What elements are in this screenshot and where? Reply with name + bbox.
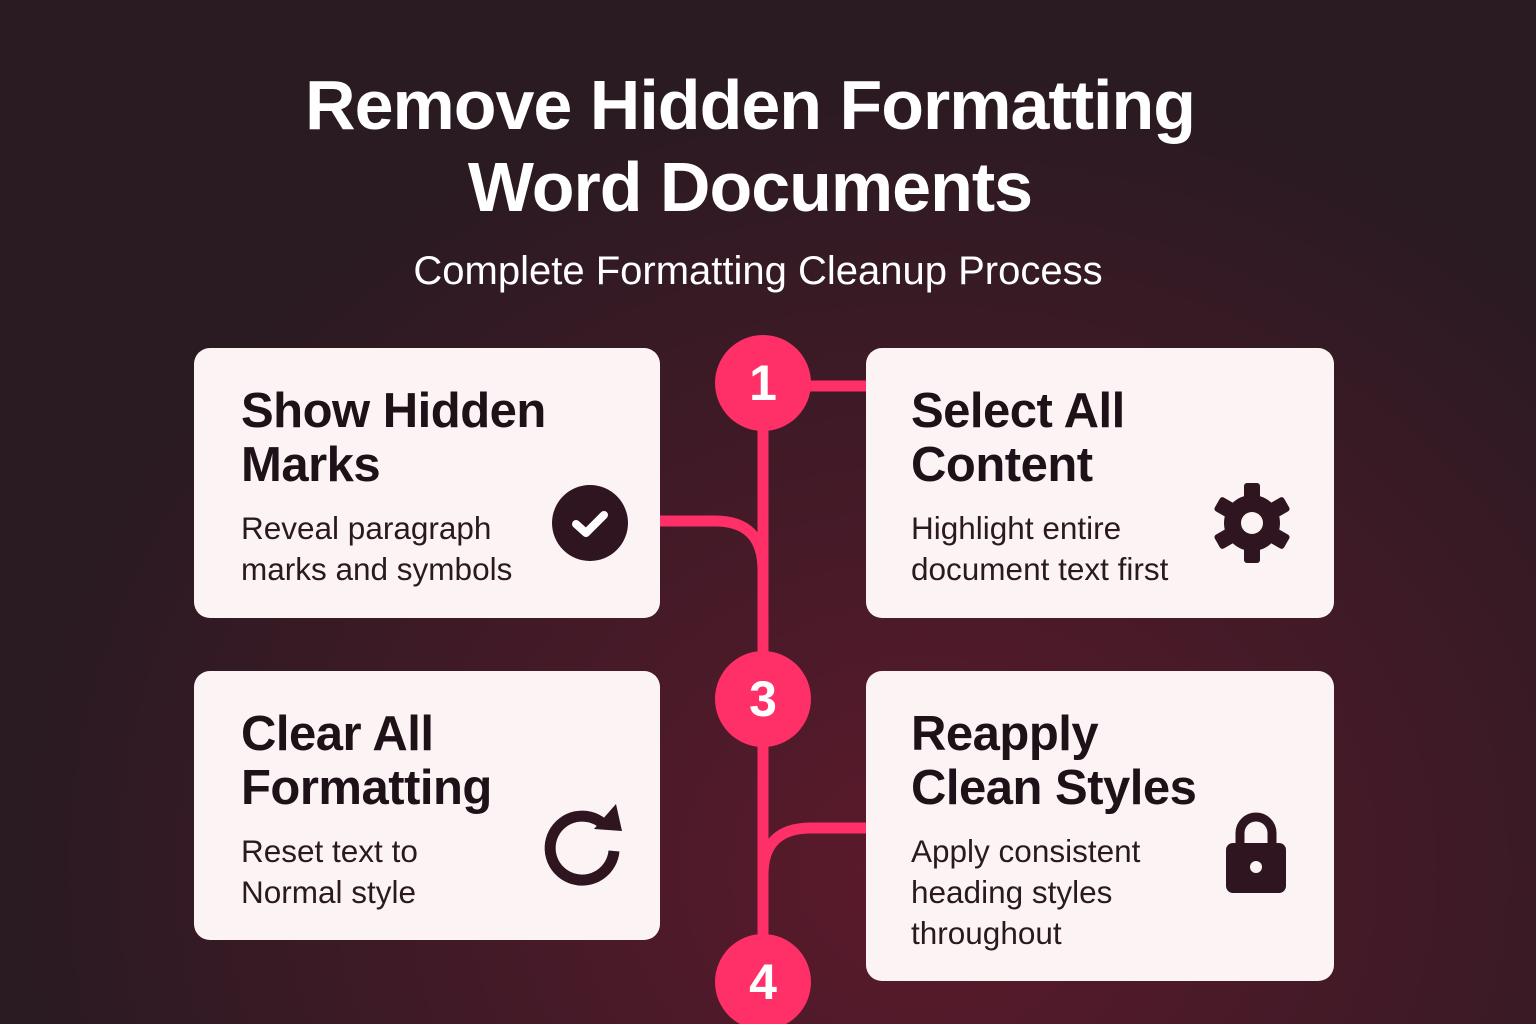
badge 3 (715, 651, 811, 747)
panel: step 4 (866, 671, 1334, 981)
text: Reset text to (241, 833, 418, 869)
text (911, 833, 1140, 951)
panel: step 1 (194, 348, 660, 618)
heading (241, 384, 546, 492)
text: marks and symbols (241, 551, 512, 587)
icon: gear (1214, 483, 1290, 563)
text (241, 510, 512, 587)
heading: Show Hidden (241, 384, 546, 438)
icon: check (552, 485, 628, 561)
text: heading styles (911, 874, 1112, 910)
heading: Formatting (241, 761, 492, 815)
title (305, 66, 1195, 226)
text: document text first (911, 551, 1168, 587)
text (911, 510, 1168, 587)
badge 4 (715, 934, 811, 1024)
text (241, 833, 418, 910)
heading: Clear All (241, 707, 433, 761)
text: throughout (911, 915, 1062, 951)
text: Apply consistent (911, 833, 1140, 869)
subtitle: Complete Formatting Cleanup Process (413, 249, 1103, 293)
text: Reveal paragraph (241, 510, 491, 546)
icon: refresh (544, 804, 622, 886)
heading (241, 707, 492, 815)
heading (911, 384, 1125, 492)
text: Highlight entire (911, 510, 1121, 546)
panel: step 3 (194, 671, 660, 940)
badge 1 (715, 335, 811, 431)
title: Word Documents (468, 148, 1032, 226)
panel: step 2 (866, 348, 1334, 618)
text: Normal style (241, 874, 416, 910)
heading: Content (911, 438, 1093, 492)
heading: Marks (241, 438, 380, 492)
icon: lock (1226, 812, 1286, 893)
title: Remove Hidden Formatting (305, 66, 1195, 144)
badge 1: 1 (749, 355, 777, 411)
heading (911, 707, 1196, 815)
heading: Reapply (911, 707, 1098, 761)
heading: Clean Styles (911, 761, 1196, 815)
badge 3: 3 (749, 671, 777, 727)
badge 4: 4 (749, 954, 777, 1010)
heading: Select All (911, 384, 1125, 438)
